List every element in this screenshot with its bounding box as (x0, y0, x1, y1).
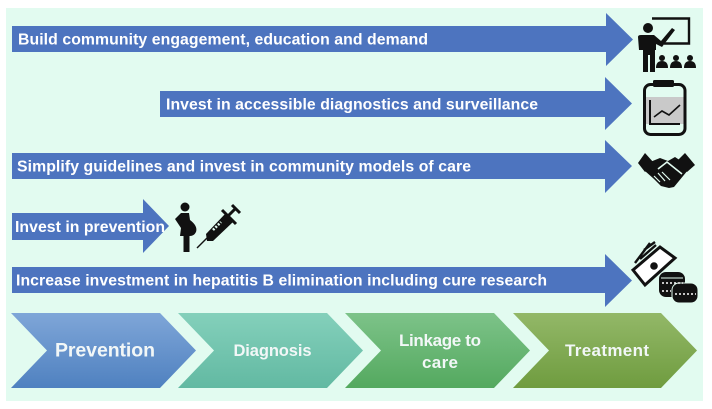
icon: money and coins (633, 242, 698, 303)
chevron: Treatment (513, 313, 697, 388)
arrow: community engagement (12, 13, 633, 66)
arrow: diagnostics: Invest in accessible diagnostics and surveillance (166, 96, 538, 114)
arrow: guidelines (12, 140, 632, 193)
icon: teacher at board (638, 18, 696, 72)
chevron: Linkage to care: care (422, 353, 458, 372)
arrow: prevention (12, 199, 169, 253)
chevron: Linkage to care: Linkage to (399, 331, 481, 350)
arrow: investment (12, 254, 632, 307)
arrow: diagnostics (160, 77, 632, 130)
arrow: investment: Increase investment in hepatitis B elimination including cure research (16, 272, 547, 290)
icon: syringe (197, 205, 240, 248)
arrow: prevention: Invest in prevention (15, 219, 165, 236)
icon: pregnant woman (175, 202, 196, 252)
chevron: Prevention: Prevention (55, 340, 155, 362)
arrow: community engagement: Build community engagement, education and demand (18, 32, 428, 48)
chevron: Diagnosis (178, 313, 363, 388)
icon: handshake (638, 153, 695, 188)
chevron: Diagnosis: Diagnosis (234, 342, 312, 360)
icon: clipboard chart (644, 80, 685, 134)
chevron: Treatment: Treatment (565, 341, 649, 360)
chevron: Prevention (11, 313, 196, 388)
arrow: guidelines: Simplify guidelines and invest in community models of care (17, 158, 471, 176)
chevron: Linkage to care (345, 313, 530, 388)
